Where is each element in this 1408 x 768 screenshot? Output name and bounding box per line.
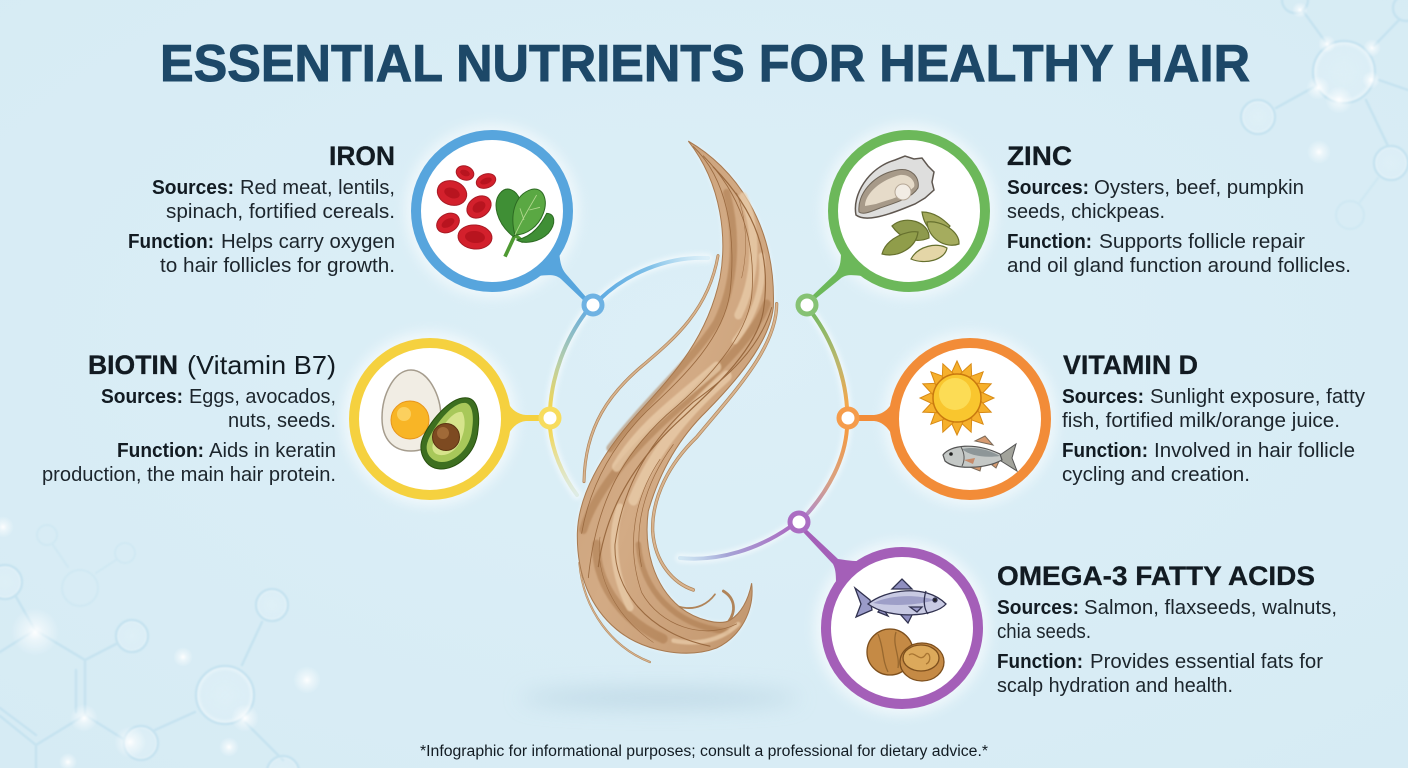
zinc text: Function: — [1007, 231, 1092, 253]
panel: zinc — [798, 124, 1351, 314]
biotin heading: (Vitamin B7) — [187, 350, 336, 380]
panel: omega-3 — [790, 513, 1337, 715]
zinc text: and oil gland function around follicles. — [1007, 255, 1351, 277]
zinc text: Supports follicle repair — [1099, 231, 1305, 253]
title: ESSENTIAL NUTRIENTS FOR HEALTHY HAIR — [160, 36, 1250, 93]
vitamin d text: Sources: — [1062, 386, 1144, 408]
iron text: Helps carry oxygen — [221, 231, 395, 253]
iron text: Sources: — [152, 177, 234, 199]
panel: biotin — [42, 332, 559, 506]
iron heading: IRON — [329, 141, 395, 171]
zinc badge — [798, 124, 996, 314]
vitamin d text: Involved in hair follicle — [1154, 440, 1355, 462]
biotin heading — [88, 350, 336, 380]
vitamin d text: Sunlight exposure, fatty — [1150, 386, 1365, 408]
molecule decoration: bottom left — [0, 516, 321, 768]
omega-3 text: scalp hydration and health. — [997, 675, 1233, 697]
omega-3 heading: OMEGA-3 FATTY ACIDS — [997, 561, 1315, 591]
zinc text: Sources: — [1007, 177, 1089, 199]
panel: iron — [128, 124, 602, 314]
biotin text: Sources: — [101, 386, 183, 408]
icon: salmon — [855, 579, 946, 623]
biotin text: Function: — [117, 440, 204, 462]
icon: egg — [382, 370, 441, 451]
omega-3 text: Sources: — [997, 597, 1079, 619]
biotin text: Aids in keratin — [209, 440, 336, 462]
vitamin d badge — [839, 332, 1057, 506]
vitamin d text: Function: — [1062, 440, 1148, 462]
icon: sun — [920, 361, 994, 435]
iron text: Function: — [128, 231, 214, 253]
biotin heading: BIOTIN — [88, 350, 178, 380]
biotin badge — [343, 332, 559, 506]
biotin text — [42, 386, 336, 486]
icon: fatty fish — [943, 436, 1017, 471]
vitamin d text — [1062, 386, 1365, 486]
connector arcs — [550, 258, 847, 559]
omega-3 text: Function: — [997, 651, 1083, 673]
icon: oyster — [855, 156, 934, 218]
zinc text: Oysters, beef, pumpkin — [1094, 177, 1304, 199]
omega-3 text: Provides essential fats for — [1090, 651, 1323, 673]
hair shadow — [520, 689, 800, 707]
vitamin d text: cycling and creation. — [1062, 464, 1250, 486]
omega-3 text: Salmon, flaxseeds, walnuts, — [1084, 597, 1337, 619]
vitamin d heading: VITAMIN D — [1063, 350, 1198, 380]
hair strand illustration — [577, 141, 777, 662]
footnote: *Infographic for informational purposes; consult a professional for dietary advice.* — [420, 743, 988, 760]
molecule decoration: top right — [1241, 0, 1408, 229]
biotin text: Eggs, avocados, — [189, 386, 336, 408]
iron text: to hair follicles for growth. — [160, 255, 395, 277]
panel: vitamin d — [839, 332, 1365, 506]
zinc heading: ZINC — [1007, 141, 1072, 171]
iron badge — [405, 124, 602, 314]
omega-3 badge — [790, 513, 989, 715]
zinc text: seeds, chickpeas. — [1007, 201, 1165, 223]
iron text: Red meat, lentils, — [240, 177, 395, 199]
icon: walnuts — [867, 629, 944, 681]
iron text: spinach, fortified cereals. — [166, 201, 395, 223]
icon: pumpkin seeds — [882, 212, 959, 262]
zinc text — [1007, 177, 1351, 277]
icon: avocado — [421, 398, 479, 469]
omega-3 text — [997, 597, 1337, 697]
omega-3 text: chia seeds. — [997, 621, 1091, 643]
icon: spinach — [496, 189, 554, 257]
icon: red blood cells — [433, 163, 498, 250]
iron text — [128, 177, 395, 277]
vitamin d text: fish, fortified milk/orange juice. — [1062, 410, 1340, 432]
biotin text: nuts, seeds. — [228, 410, 336, 432]
biotin text: production, the main hair protein. — [42, 464, 336, 486]
